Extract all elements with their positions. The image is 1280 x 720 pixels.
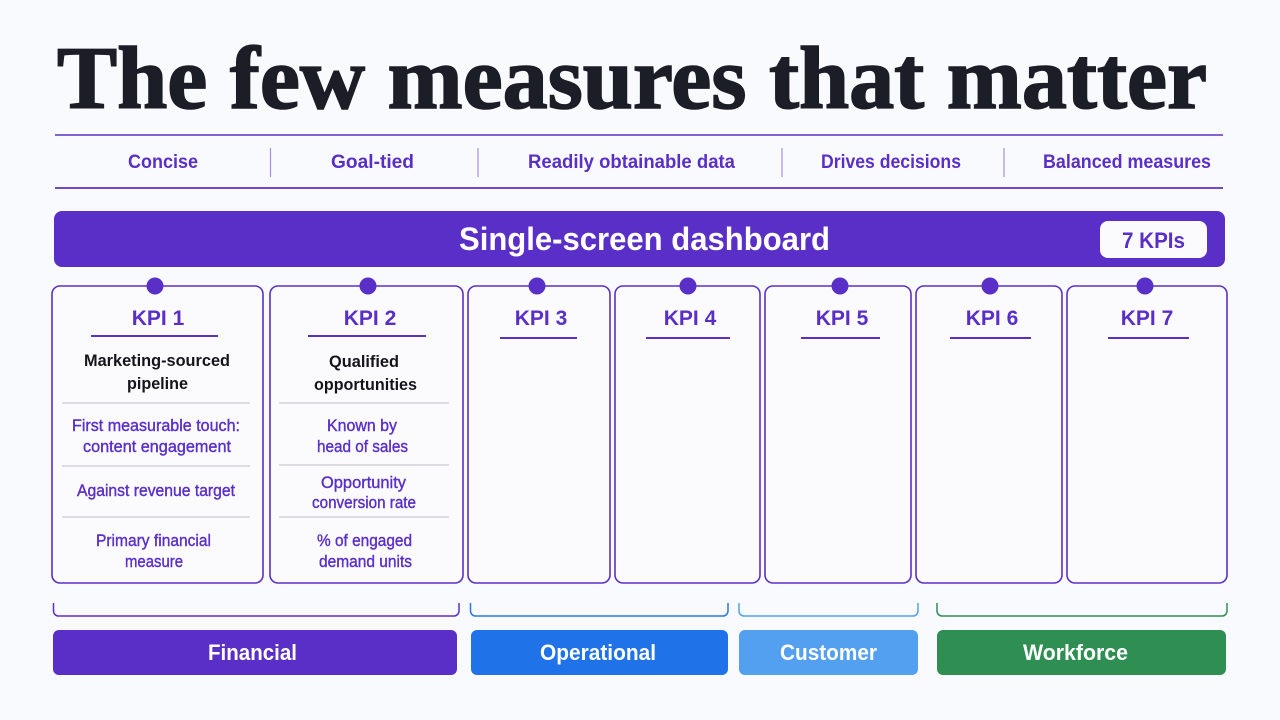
KPI 1 name: Marketing-sourced — [84, 351, 230, 370]
banner heading: Single-screen dashboard — [459, 221, 830, 257]
KPI 1 first touch — [72, 416, 240, 456]
panel: KPI 5: KPI 5 — [816, 307, 869, 330]
panel: KPI 7 — [1067, 278, 1227, 583]
KPI 2 name: Qualified — [329, 352, 399, 371]
category: operational — [471, 630, 728, 675]
KPI 2 engagement — [317, 531, 412, 571]
bracket: workforce — [937, 603, 1227, 616]
criterion: drives decisions: Drives decisions — [821, 152, 961, 173]
panel: KPI 6: KPI 6 — [966, 307, 1018, 330]
panel: KPI 2: KPI 2 — [344, 307, 396, 330]
KPI 1 first touch: content engagement — [83, 437, 231, 456]
title: The few measures that matter — [57, 30, 1207, 128]
KPI 1 role: measure — [125, 552, 183, 571]
KPI 1 role — [96, 531, 211, 571]
panel: KPI 5 — [765, 278, 911, 583]
KPI 2 conversion: conversion rate — [312, 493, 416, 512]
panel: KPI 4: KPI 4 — [664, 307, 717, 330]
category: financial — [53, 630, 457, 675]
dashboard banner — [54, 211, 1225, 267]
KPI 1 first touch: First measurable touch: — [72, 416, 240, 435]
panel: KPI 3 — [468, 278, 610, 583]
panel: KPI 4 — [615, 278, 760, 583]
KPI 2 owner: head of sales — [317, 437, 408, 456]
panel: KPI 1 — [52, 278, 263, 583]
KPI 2 engagement: % of engaged — [317, 531, 412, 550]
KPI 1 name: pipeline — [127, 374, 188, 393]
KPI 1 role: Primary financial — [96, 531, 211, 550]
KPI count badge: 7 KPIs — [1122, 228, 1185, 253]
category: financial: Financial — [208, 640, 297, 665]
KPI 2 name — [314, 352, 417, 394]
category: customer: Customer — [780, 640, 877, 665]
panel: KPI 2 — [270, 278, 463, 583]
criterion: readily obtainable data: Readily obtainable data — [528, 152, 735, 173]
category: customer — [739, 630, 918, 675]
KPI 1 target: Against revenue target — [77, 481, 235, 500]
KPI 1 name — [84, 351, 230, 393]
bracket: operational — [470, 603, 728, 616]
panel: KPI 6 — [916, 278, 1062, 583]
KPI 2 owner: Known by — [327, 416, 397, 435]
criterion: concise: Concise — [128, 152, 198, 173]
KPI 2 owner — [317, 416, 408, 456]
KPI 2 conversion: Opportunity — [321, 473, 406, 492]
criteria strip — [55, 135, 1223, 188]
KPI count badge — [1100, 221, 1207, 258]
category: workforce: Workforce — [1023, 640, 1128, 665]
KPI 2 conversion — [312, 473, 416, 512]
criterion: goal-tied: Goal-tied — [331, 152, 414, 173]
KPI 2 name: opportunities — [314, 375, 417, 394]
criterion: balanced measures: Balanced measures — [1043, 152, 1211, 173]
panel: KPI 7: KPI 7 — [1121, 307, 1173, 330]
panel: KPI 3: KPI 3 — [515, 307, 567, 330]
panel: KPI 1: KPI 1 — [132, 307, 185, 330]
bracket: financial — [54, 603, 459, 616]
KPI 2 engagement: demand units — [319, 552, 412, 571]
bracket: customer — [739, 603, 918, 616]
category: operational: Operational — [540, 640, 656, 665]
category: workforce — [937, 630, 1226, 675]
